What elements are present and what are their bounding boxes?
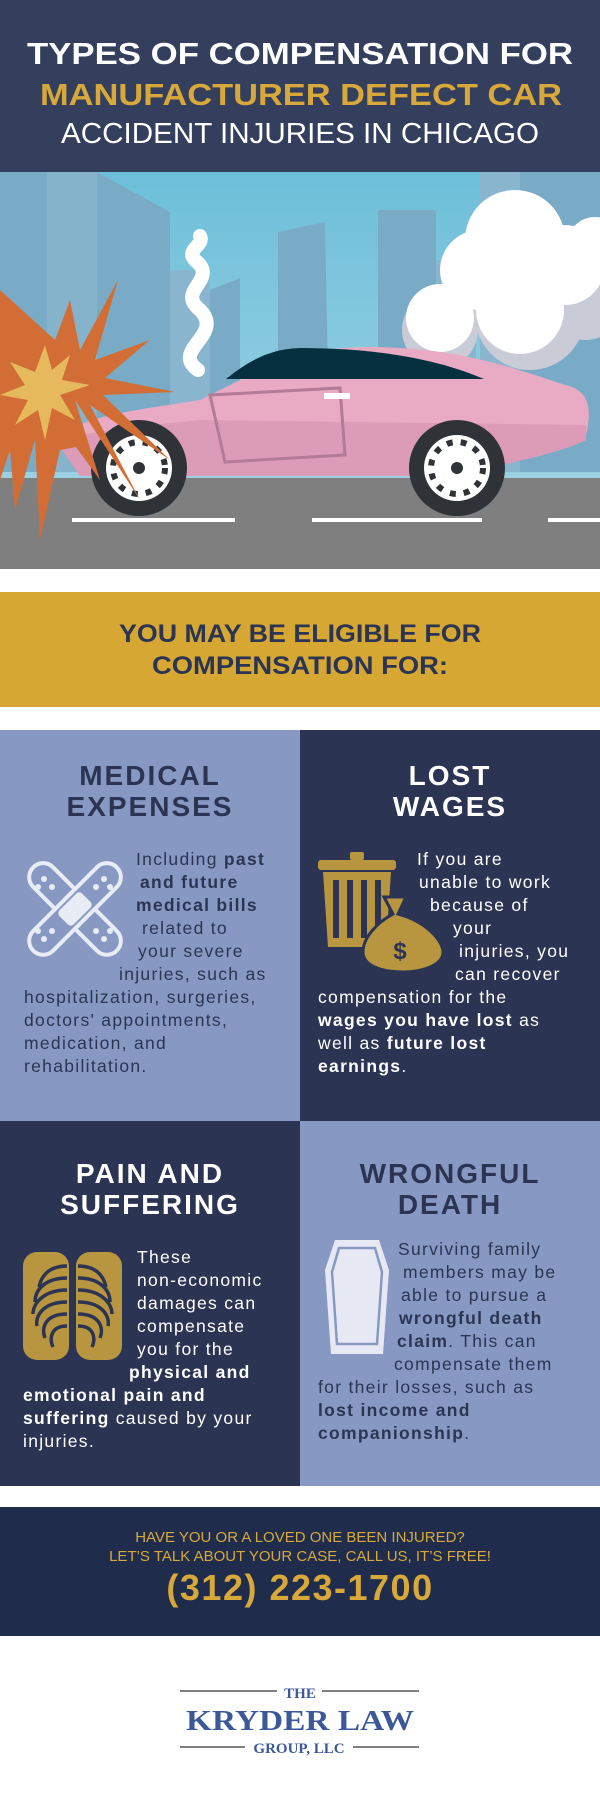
heading xyxy=(67,760,233,822)
logo xyxy=(180,1686,419,1757)
body text: able to pursue a xyxy=(401,1285,547,1305)
body text xyxy=(318,849,569,1076)
body text: injuries, you xyxy=(459,941,569,961)
banner: eligible: YOU MAY BE ELIGIBLE FOR xyxy=(119,620,481,648)
explosion xyxy=(0,280,175,540)
icon: ribcage xyxy=(23,1252,122,1360)
heading xyxy=(360,1158,540,1220)
heading xyxy=(60,1158,240,1220)
body text: and future xyxy=(140,872,239,892)
body text: emotional pain and xyxy=(23,1385,206,1405)
body text: well as future lost xyxy=(318,1033,487,1053)
banner: eligible xyxy=(0,592,600,707)
title line 2: MANUFACTURER DEFECT CAR xyxy=(40,77,562,112)
car body xyxy=(55,347,589,475)
body text: claim. This can xyxy=(397,1331,537,1351)
icon: trash can and money bag: $ xyxy=(393,938,407,965)
body text: medical bills xyxy=(136,895,258,915)
panel: lost wages xyxy=(300,730,600,1121)
icon: bandages xyxy=(27,861,123,957)
body text: lost income and xyxy=(318,1400,471,1420)
body text: injuries. xyxy=(23,1431,95,1451)
body text: injuries, such as xyxy=(119,964,267,984)
heading xyxy=(392,760,507,822)
body text: Including past xyxy=(136,849,265,869)
body text: physical and xyxy=(129,1362,251,1382)
body text: hospitalization, surgeries, xyxy=(24,987,257,1007)
icon: coffin xyxy=(325,1240,389,1354)
body text: wrongful death xyxy=(399,1308,543,1328)
body text: doctors' appointments, xyxy=(24,1010,228,1030)
heading: PAIN AND xyxy=(76,1158,224,1189)
illustration: car crash xyxy=(0,172,600,569)
body text: companionship. xyxy=(318,1423,470,1443)
body text: compensate xyxy=(137,1316,245,1336)
body text: compensate them xyxy=(394,1354,553,1374)
panel: pain and suffering xyxy=(0,1121,300,1486)
wheels xyxy=(91,420,187,516)
body text: your xyxy=(453,918,492,938)
body text: medication, and xyxy=(24,1033,167,1053)
panel: wrongful death xyxy=(300,1121,600,1486)
phone number: (312) 223-1700 xyxy=(166,1567,434,1608)
heading: EXPENSES xyxy=(67,791,233,822)
body text: unable to work xyxy=(419,872,551,892)
body text: If you are xyxy=(417,849,503,869)
body text: damages can xyxy=(137,1293,256,1313)
body text: earnings. xyxy=(318,1056,408,1076)
heading: WAGES xyxy=(393,791,507,822)
body text: related to xyxy=(142,918,228,938)
body text: rehabilitation. xyxy=(24,1056,148,1076)
body text: for their losses, such as xyxy=(318,1377,534,1397)
cta text: LET’S TALK ABOUT YOUR CASE, CALL US, IT’S FREE! xyxy=(109,1548,491,1565)
heading: LOST xyxy=(409,760,491,791)
body text: These xyxy=(137,1247,192,1267)
body text: your severe xyxy=(138,941,244,961)
heading: SUFFERING xyxy=(60,1189,240,1220)
body text: non-economic xyxy=(137,1270,263,1290)
road xyxy=(0,478,600,569)
body text: wages you have lost as xyxy=(318,1010,540,1030)
icon: trash can and money bag xyxy=(318,852,442,970)
heading: DEATH xyxy=(398,1189,502,1220)
logo: THE xyxy=(284,1686,316,1702)
body text: Surviving family xyxy=(398,1239,541,1259)
logo: GROUP, LLC xyxy=(253,1741,345,1757)
heading: WRONGFUL xyxy=(360,1158,540,1189)
title line 1: TYPES OF COMPENSATION FOR xyxy=(27,36,573,71)
body text: because of xyxy=(430,895,529,915)
cta text xyxy=(109,1529,491,1565)
body text xyxy=(23,1247,263,1451)
body text xyxy=(24,849,267,1076)
header xyxy=(0,0,600,172)
smoke xyxy=(190,236,207,370)
heading: MEDICAL xyxy=(79,760,221,791)
body text xyxy=(318,1239,556,1443)
body text: you for the xyxy=(137,1339,234,1359)
cta text: HAVE YOU OR A LOVED ONE BEEN INJURED? xyxy=(135,1529,465,1546)
title line 3: ACCIDENT INJURIES IN CHICAGO xyxy=(61,118,539,150)
banner: eligible: COMPENSATION FOR: xyxy=(152,652,448,680)
body text: members may be xyxy=(403,1262,556,1282)
cloud xyxy=(402,245,600,370)
body text: suffering caused by your xyxy=(23,1408,253,1428)
call to action xyxy=(0,1507,600,1636)
body text: can recover xyxy=(455,964,561,984)
body text: compensation for the xyxy=(318,987,507,1007)
logo: KRYDER LAW xyxy=(186,1705,414,1737)
panel: medical expenses xyxy=(0,730,300,1121)
